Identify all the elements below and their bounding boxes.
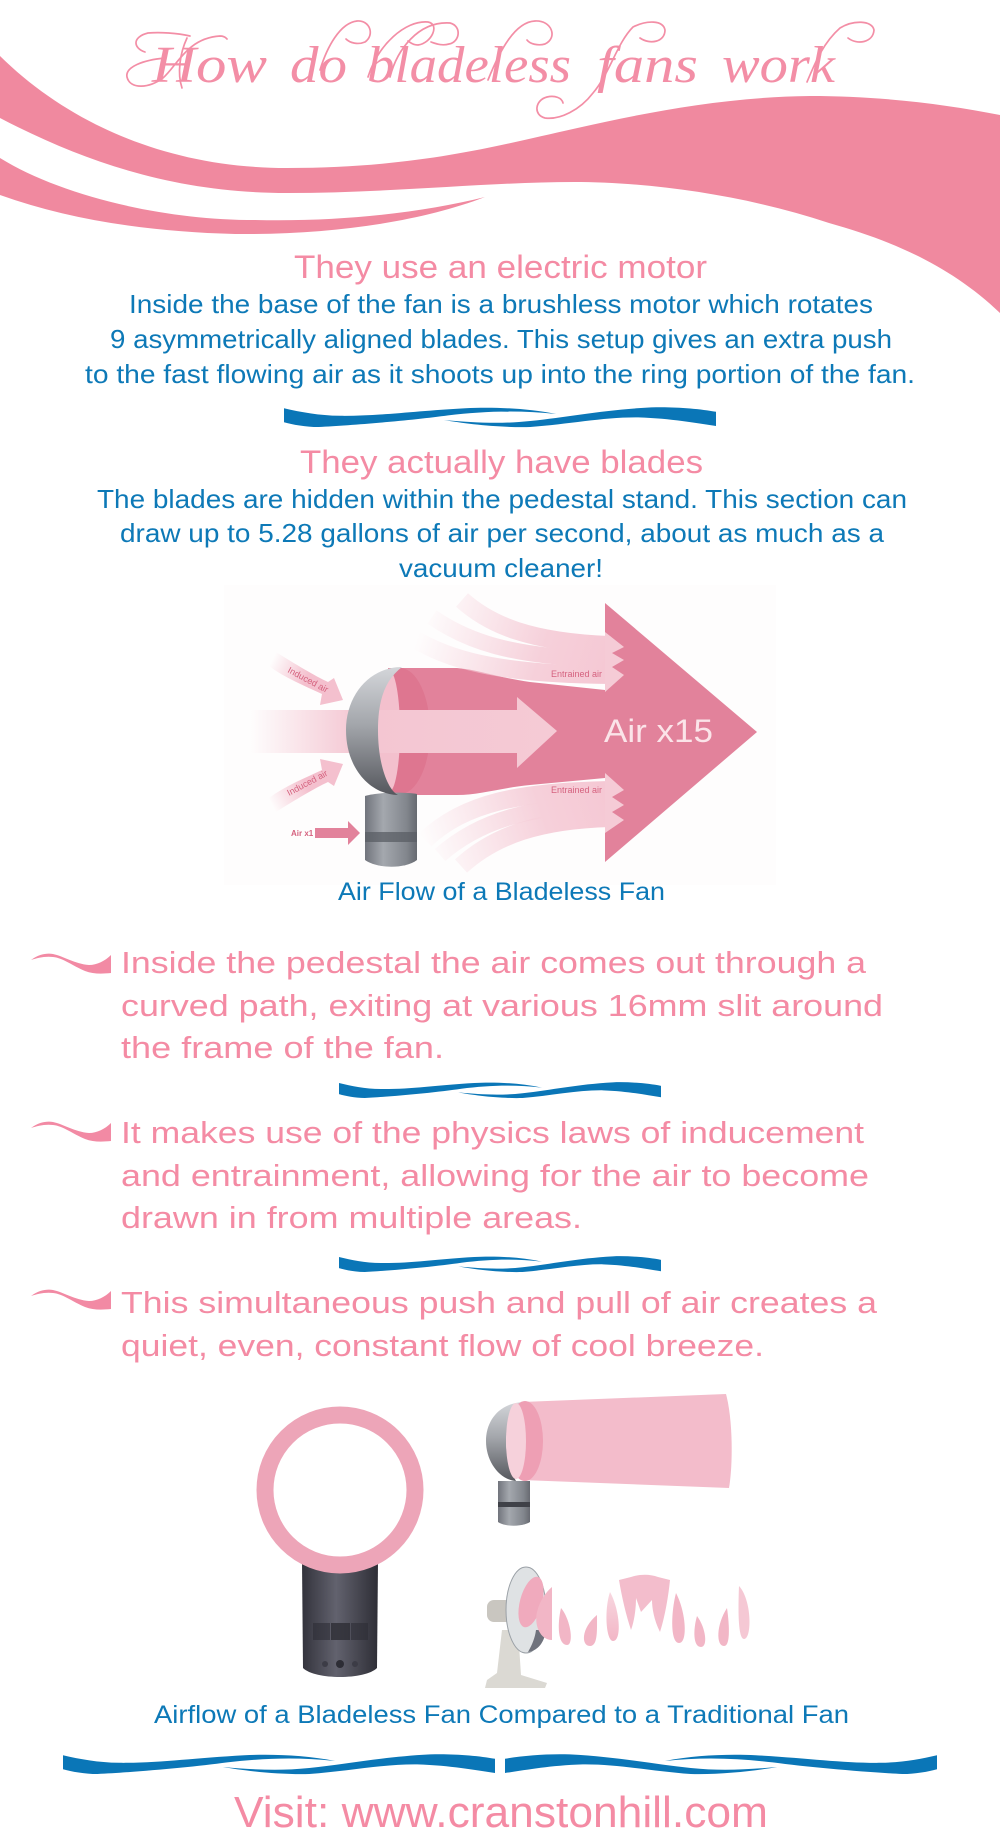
base [498,1481,530,1526]
entrained air labels: Entrained air [551,669,602,679]
induced air upper arrow [269,652,343,705]
text: bullet 2: and entrainment, allowing for the air to become [121,1158,869,1193]
darker lens of air at ring [370,668,430,794]
induced air labels: Induced air [286,665,330,695]
text: bullet 3 [121,1285,878,1363]
caption: air flow: Air Flow of a Bladeless Fan [338,878,665,906]
diagram: air flow of a bladeless fan [224,585,776,885]
fan pedestal base [365,793,417,867]
stand [485,1630,547,1688]
entrained air labels [551,669,602,795]
diagram: bladeless fan side view with airflow [486,1394,732,1526]
diagram: traditional fan with airflow [485,1567,749,1688]
text: bullet 1: curved path, exiting at various 16mm slit around [121,988,883,1023]
heading: actually have blades: They actually have blades [300,444,703,480]
big air x15 arrow [388,603,757,862]
background wave: large pink swoosh [0,56,1000,313]
divider 2 [339,1082,661,1098]
body text: actually have blades [97,484,907,583]
bullet 1 [31,945,883,1065]
caption: comparison: Airflow of a Bladeless Fan Compared to a Traditional Fan [154,1701,849,1729]
entrained air upper arrowheads [605,632,624,692]
airflow pulses [536,1575,749,1647]
fan cage [506,1567,546,1653]
air x15 label: Air x15 [604,713,713,749]
induced air labels: Induced air [285,768,329,798]
text: bullet 3: quiet, even, constant flow of cool breeze. [121,1328,764,1363]
ring darker band [507,1401,543,1481]
title: work [722,37,836,94]
airflow cone [522,1394,732,1488]
ring opening [506,1403,526,1479]
text: bullet 1 [121,945,883,1065]
text: bullet 2: drawn in from multiple areas. [121,1200,582,1235]
fan base dark [302,1562,378,1677]
divider 4 right [505,1754,937,1774]
body text: electric motor: to the fast flowing air as it shoots up into the ring portion of the fan. [85,359,915,389]
divider 3 [339,1256,661,1272]
title: bladeless [367,37,571,94]
text: bullet 1: Inside the pedestal the air comes out through a [121,945,867,980]
air x1 arrow [291,821,360,845]
induced air lower arrow [269,759,343,812]
body text: electric motor: Inside the base of the fan is a brushless motor which rotates [129,289,873,319]
entrained air lower bands [425,790,610,866]
text: bullet 1: the frame of the fan. [121,1030,444,1065]
fan dark back [528,1630,546,1652]
title: do [290,37,347,94]
body text: electric motor: 9 asymmetrically aligned blades. This setup gives an extra push [110,324,892,354]
bullet 2 [31,1115,869,1235]
icon: swoosh bullet 2 [31,1122,111,1142]
divider 4 left [63,1754,495,1774]
section: actually have blades [97,444,907,583]
bullet 3 [31,1285,878,1363]
body text: electric motor [85,289,915,389]
heading: electric motor: They use an electric motor [294,249,707,285]
body text: actually have blades: The blades are hidden within the pedestal stand. This section can [97,484,907,514]
central white air arrow [251,697,557,768]
fan blade air [514,1574,548,1630]
ring silver [486,1402,526,1481]
air x1 arrow: Air x1 [291,829,314,838]
induced air labels [285,665,330,798]
entrained air lower arrowheads [605,773,624,833]
text: bullet 3: This simultaneous push and pull of air creates a [121,1285,878,1320]
motor [487,1600,517,1622]
ring opening [378,670,400,792]
body text: actually have blades: draw up to 5.28 gallons of air per second, about as much as a [120,518,885,548]
pink ring [265,1415,415,1565]
entrained air upper bands [406,600,610,675]
icon: swoosh bullet 3 [31,1290,111,1310]
icon: swoosh bullet 1 [31,954,111,974]
title [151,37,836,94]
section: electric motor [85,249,915,389]
entrained air labels: Entrained air [551,785,602,795]
divider 1 [284,407,716,427]
diagram: bladeless fan front view [265,1415,415,1677]
text: bullet 2: It makes use of the physics laws of inducement [121,1115,864,1150]
text: bullet 2 [121,1115,869,1235]
background wave: small pink swoosh [0,158,485,234]
title flourishes [127,21,874,118]
title: How [151,37,267,94]
title: fans [597,37,698,94]
footer link text: Visit: www.cranstonhill.com [234,1788,768,1837]
body text: actually have blades: vacuum cleaner! [399,553,603,583]
fan ring silver [346,667,402,795]
